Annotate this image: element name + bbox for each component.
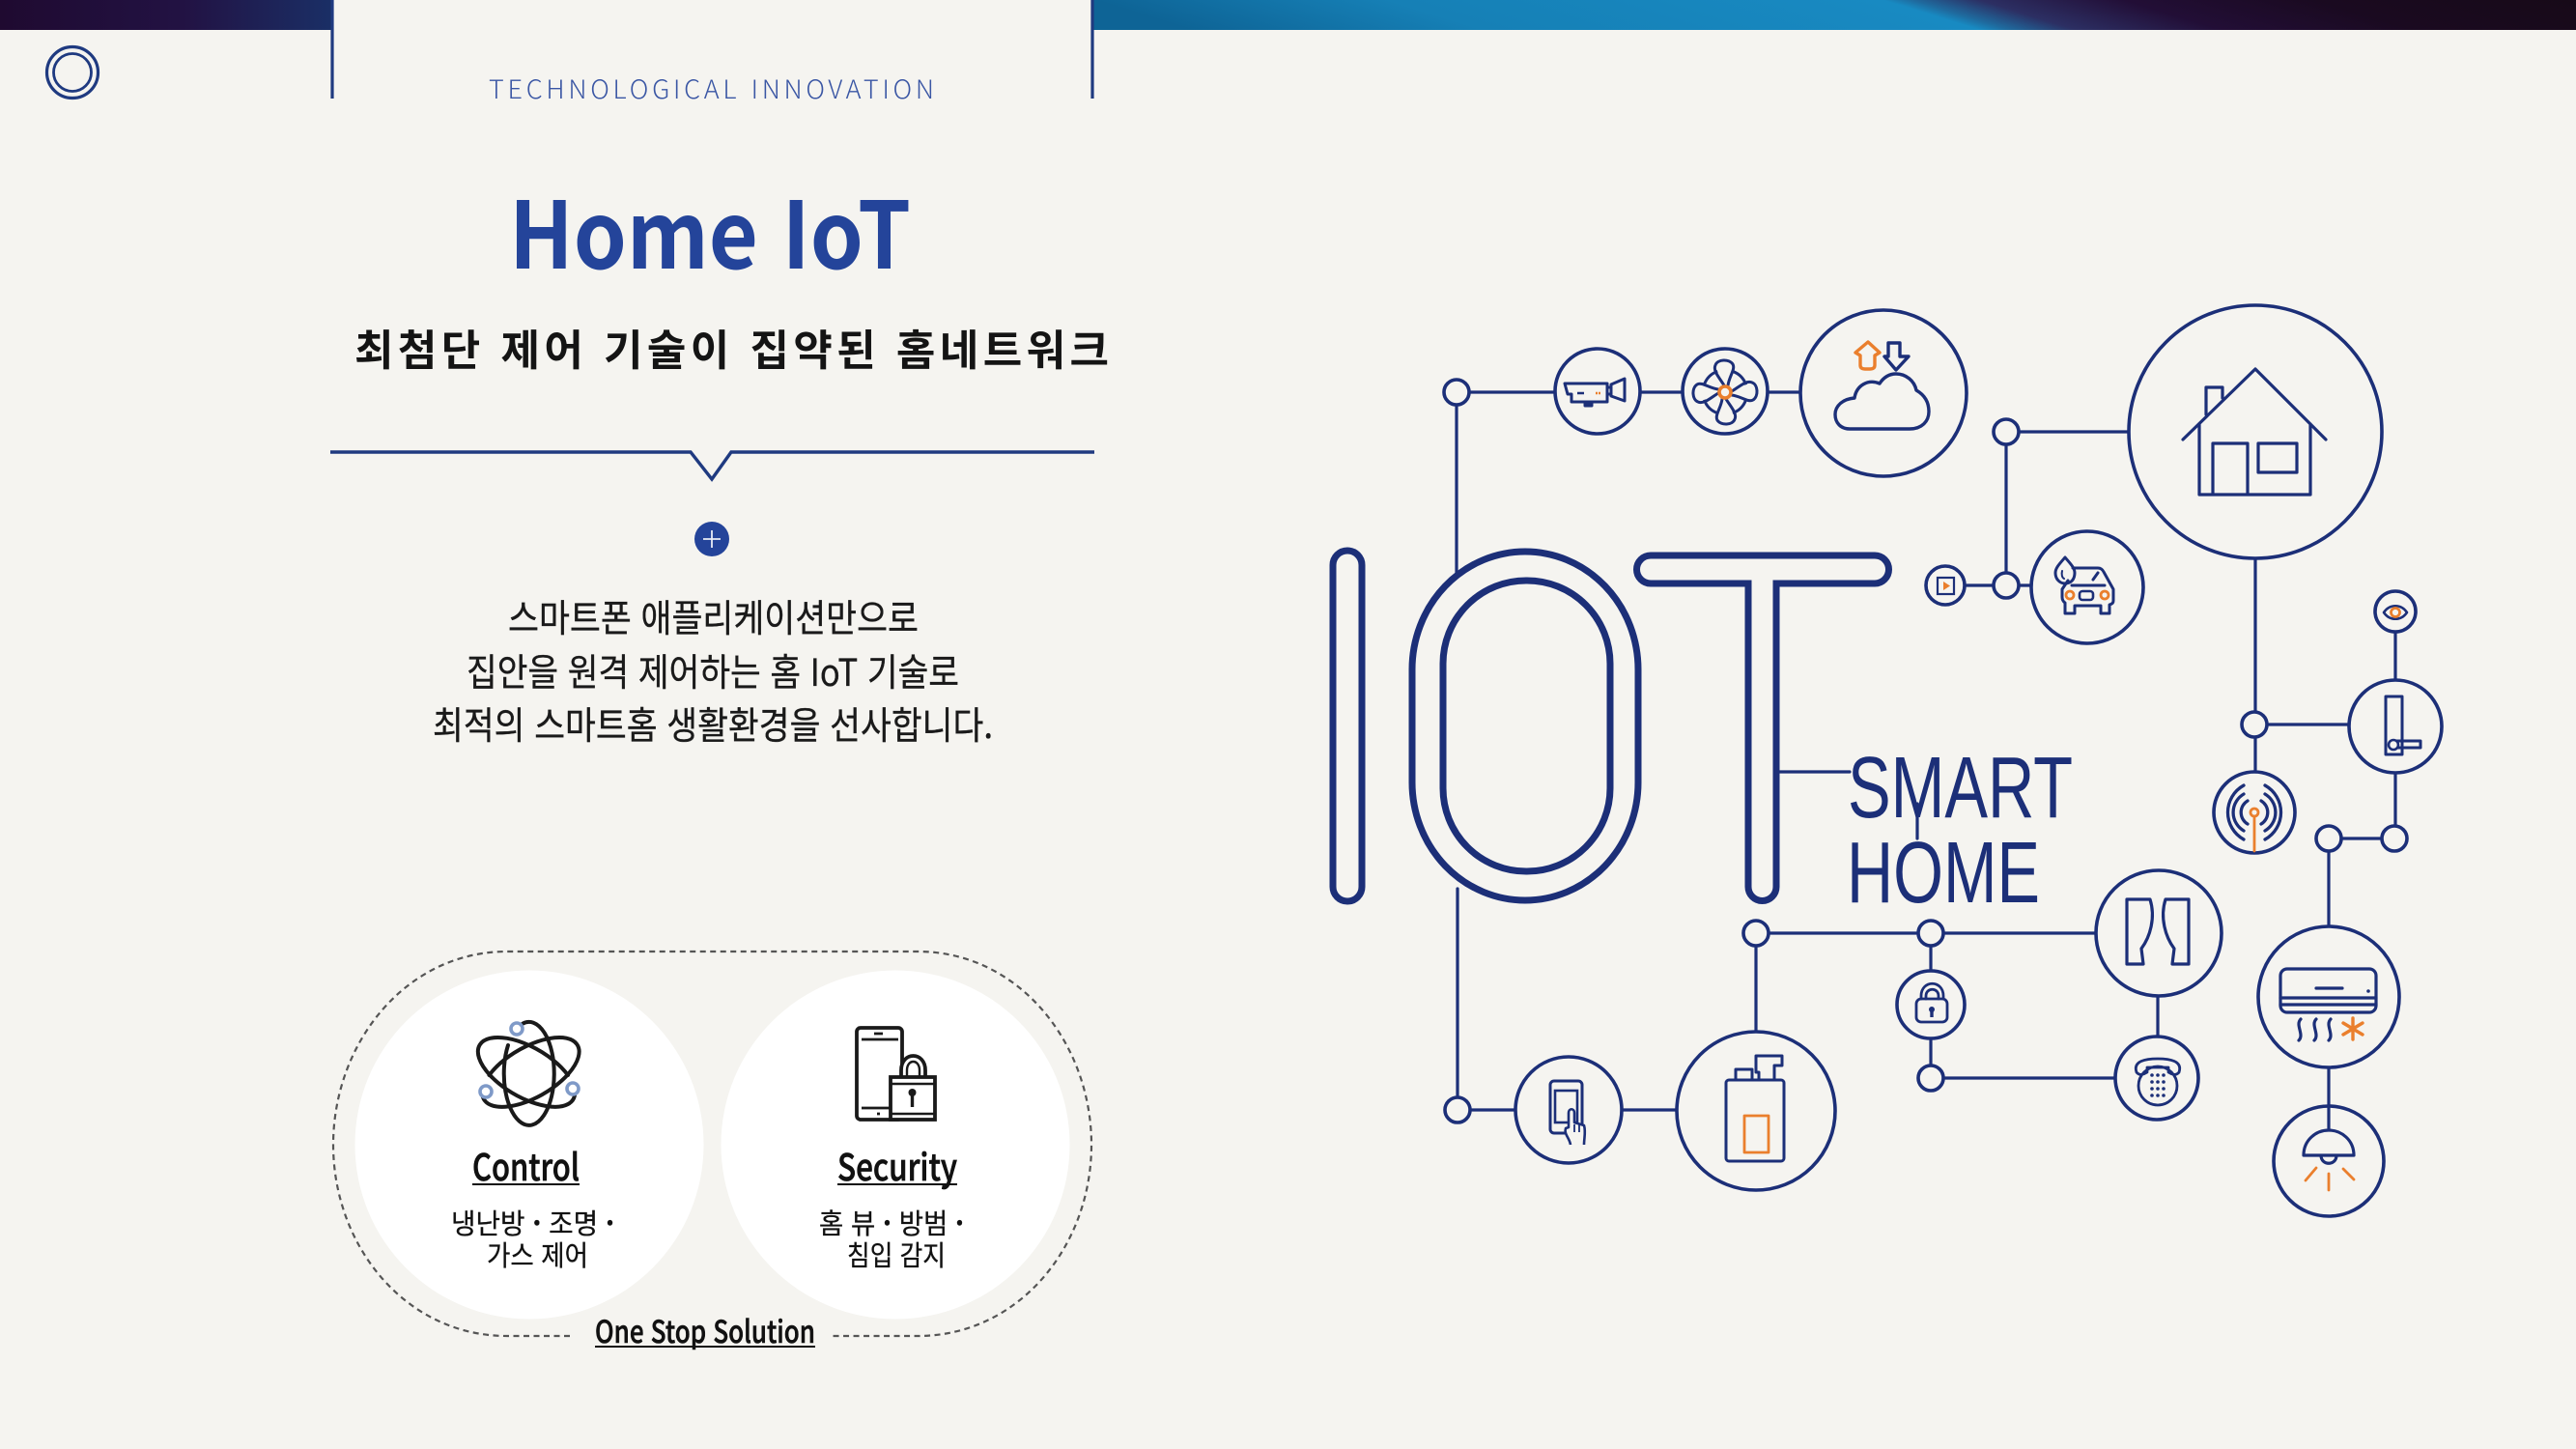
icon: smartphone touch (1515, 1057, 1622, 1163)
icon: atom (478, 1022, 580, 1125)
junction nodes (1444, 380, 2407, 1122)
plus badge (694, 522, 729, 556)
subtitle: 최첨단 제어 기술이 집약된 홈네트워크 (354, 316, 1109, 378)
control description (451, 1202, 614, 1274)
icon: telephone (2115, 1037, 2198, 1120)
icon: air conditioner (2258, 926, 2399, 1067)
smart home wordmark (1847, 740, 2073, 922)
icon: car wash (2031, 531, 2143, 643)
smart home wordmark: SMART (1848, 740, 2073, 837)
icon: boiler (1677, 1032, 1835, 1190)
icon: curtains (2096, 870, 2222, 996)
icon: wifi signal (2214, 772, 2295, 853)
tab frame lines (332, 0, 1092, 99)
panel: control (355, 970, 703, 1320)
security description: 침입 감지 (847, 1234, 946, 1274)
panel: one stop solution (333, 952, 1091, 1352)
icon: phone and lock (857, 1028, 935, 1120)
icon: eye (2375, 591, 2416, 632)
connector lines (1457, 392, 2395, 1130)
icon: camera (1555, 349, 1640, 434)
security label: Security (837, 1138, 957, 1191)
control label: Control (472, 1138, 580, 1191)
security description (819, 1202, 964, 1274)
dashed outline (333, 952, 1091, 1336)
letter O (1412, 552, 1638, 900)
one stop solution label: One Stop Solution (595, 1308, 815, 1352)
diagram: IoT smart home network (1333, 305, 2442, 1216)
divider with notch (330, 452, 1094, 479)
security description: 홈 뷰 · 방범 · (819, 1202, 964, 1242)
icon: padlock (1897, 971, 1965, 1038)
eyebrow text: TECHNOLOGICAL INNOVATION (489, 69, 934, 106)
panel: security (721, 970, 1070, 1320)
icon: door lock (2349, 680, 2442, 773)
title: Home IoT (509, 161, 911, 296)
body text: 최적의 스마트홈 생활환경을 선사합니다. (433, 696, 993, 751)
top bar right (1092, 0, 2576, 30)
letter I (1333, 551, 1362, 901)
control description: 냉난방 · 조명 · (451, 1202, 614, 1242)
icon: fan (1683, 349, 1768, 434)
body text (433, 589, 993, 751)
logo ring (46, 46, 99, 99)
icon: media tag (1926, 566, 1965, 605)
body text: 스마트폰 애플리케이션만으로 (508, 589, 919, 643)
icon: lamp (2274, 1106, 2384, 1216)
icon: house (2129, 305, 2382, 558)
icon: cloud sync (1800, 310, 1967, 476)
smart home wordmark: HOME (1847, 825, 2040, 922)
letter T (1636, 555, 1889, 901)
control description: 가스 제어 (487, 1234, 588, 1274)
top bar left (0, 0, 333, 30)
body text: 집안을 원격 제어하는 홈 IoT 기술로 (467, 643, 959, 697)
